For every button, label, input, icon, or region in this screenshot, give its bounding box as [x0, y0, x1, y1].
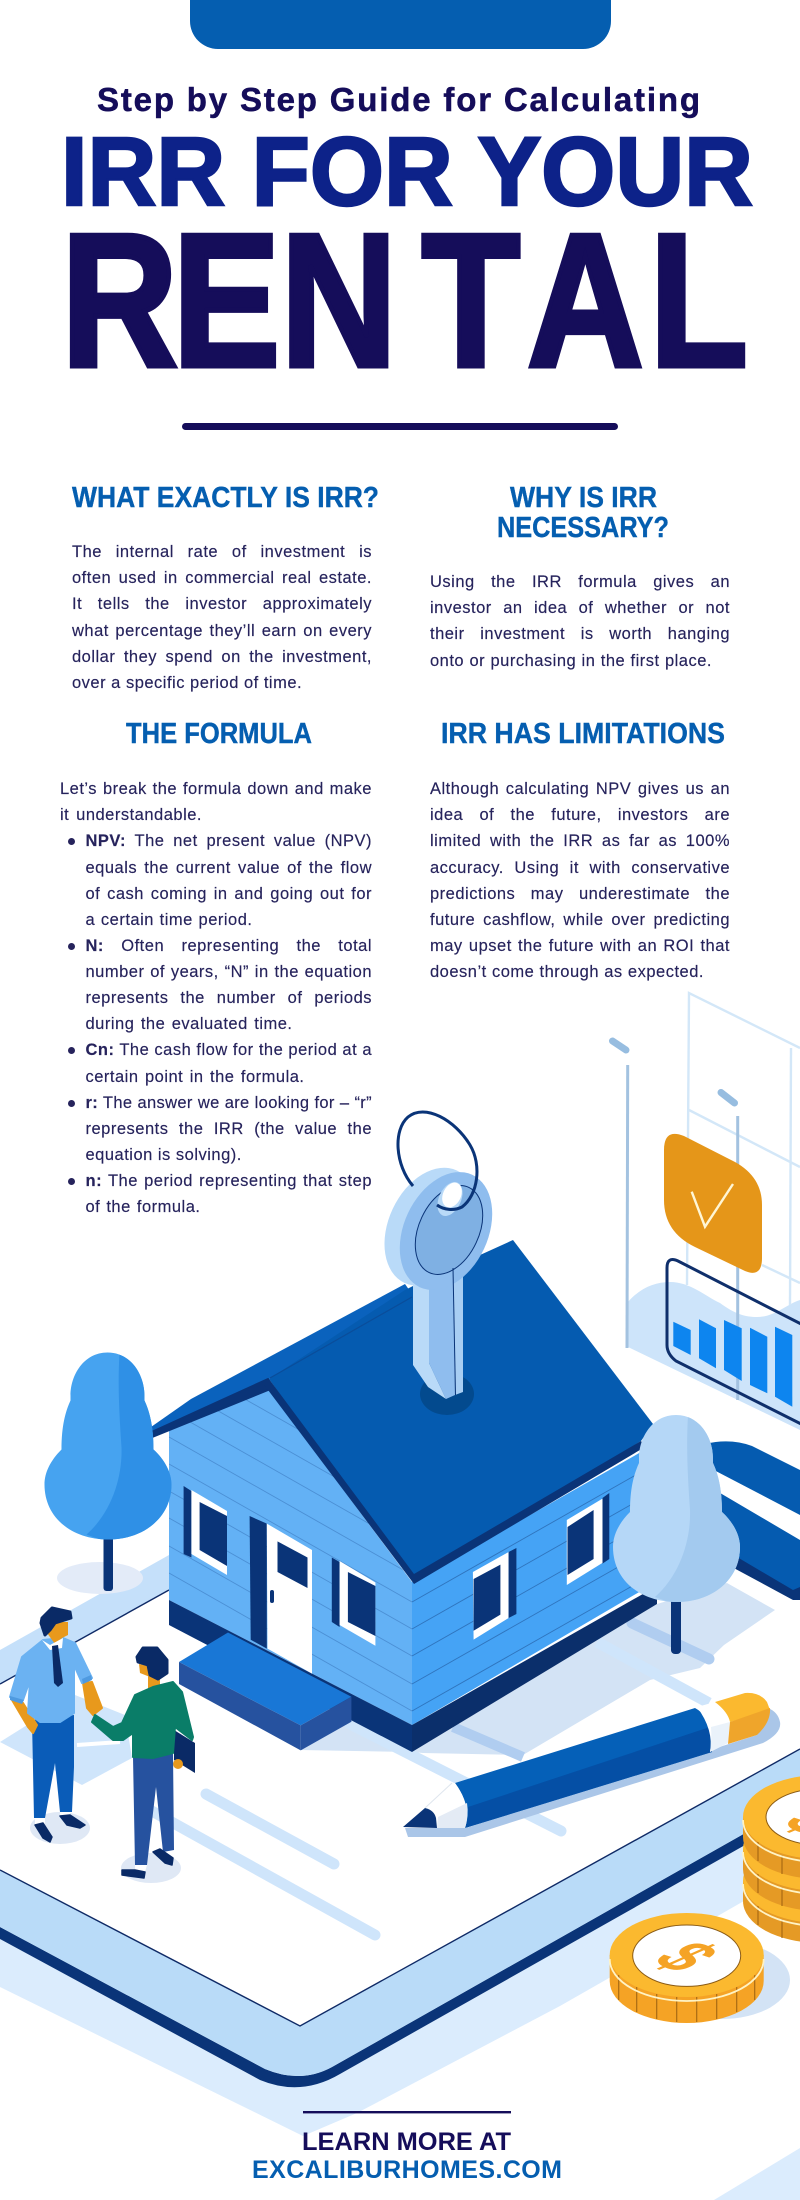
text: why is IRR necessary: onto or purchasing in the first place.	[430, 652, 712, 670]
text: what exactly is IRR: over a specific period of time.	[72, 674, 302, 692]
learn more: LEARN MORE AT	[302, 2128, 511, 2156]
text: the formula: Let’s break the formula down and make	[60, 780, 372, 798]
walls	[169, 1390, 640, 1725]
right chart panel	[612, 993, 800, 1430]
coin stack	[743, 1775, 800, 1943]
text: what exactly is IRR: dollar they spend on the investment,	[72, 648, 372, 666]
text: the formula: equation is solving).	[86, 1146, 242, 1164]
title line one: IRR FOR YOUR	[61, 117, 753, 226]
heading: IRR has limitations: IRR HAS LIMITATIONS	[441, 718, 725, 750]
bottom coin	[743, 1839, 800, 1943]
roof	[131, 1240, 653, 1584]
text: the formula: number of years, “N” in the equation	[86, 963, 372, 981]
key	[366, 1112, 510, 1415]
text: what exactly is IRR	[72, 543, 372, 692]
person: man with tie	[10, 1608, 102, 1844]
pencil	[403, 1693, 780, 1837]
text: the formula: N: Often representing the total	[86, 937, 372, 955]
text: IRR has limitations: idea of the future, investors are	[430, 806, 730, 824]
tablet platform edge	[0, 1555, 800, 2087]
right dark blue card	[705, 1441, 800, 1600]
text: IRR has limitations: future cashflow, while over predicting	[430, 911, 730, 929]
text: the formula: equals the current value of the flow	[86, 859, 372, 877]
text: IRR has limitations	[430, 780, 730, 981]
heading: why is IRR necessary: WHY IS IRR	[510, 482, 657, 514]
foundation	[169, 1586, 657, 1752]
text: what exactly is IRR: It tells the investor approximately	[72, 595, 372, 613]
text: IRR has limitations: doesn’t come through as expected.	[430, 963, 704, 981]
text: the formula: certain point in the formula.	[86, 1068, 304, 1086]
text: why is IRR necessary: their investment is worth hanging	[430, 625, 730, 643]
windows	[184, 1486, 609, 1646]
left tree	[44, 1352, 182, 1591]
title rule	[182, 423, 618, 430]
text: the formula: a certain time period.	[86, 911, 252, 929]
text: the formula: of the formula.	[86, 1198, 200, 1216]
text: the formula: represents the number of periods	[86, 989, 372, 1007]
text: IRR has limitations: predictions may underestimate the	[430, 885, 730, 903]
bars	[673, 1319, 792, 1407]
text: why is IRR necessary: Using the IRR formula gives an	[430, 573, 730, 591]
text: IRR has limitations: limited with the IRR as far as 100%	[430, 832, 730, 850]
text: why is IRR necessary	[430, 573, 730, 670]
key ring	[398, 1112, 477, 1209]
text: what exactly is IRR: what percentage they’ll earn on every	[72, 622, 372, 640]
right tree	[613, 1415, 750, 1654]
pale ground bands	[0, 1814, 800, 2200]
text: the formula: it understandable.	[60, 806, 202, 824]
text: the formula: r: The answer we are looking for – “r”	[86, 1094, 372, 1112]
footer call to action	[252, 2111, 562, 2184]
ground shadows and stripes	[0, 1583, 775, 1935]
top coin	[743, 1775, 800, 1879]
heading: the formula: THE FORMULA	[126, 718, 312, 750]
text: the formula: during the evaluated time.	[86, 1015, 292, 1033]
website: EXCALIBURHOMES.COM	[252, 2156, 562, 2184]
middle coin	[743, 1807, 800, 1911]
text: why is IRR necessary: investor an idea of whether or not	[430, 599, 730, 617]
text: what exactly is IRR: often used in commercial real estate.	[72, 569, 372, 587]
text: the formula: n: The period representing that step	[86, 1172, 372, 1190]
text: the formula	[60, 780, 372, 1216]
step	[179, 1632, 351, 1750]
text: the formula: NPV: The net present value (NPV)	[86, 832, 372, 850]
subtitle: Step by Step Guide for Calculating	[97, 81, 700, 118]
text: what exactly is IRR: The internal rate of investment is	[72, 543, 372, 561]
door	[250, 1516, 312, 1674]
heading: what exactly is IRR: WHAT EXACTLY IS IRR?	[72, 482, 379, 514]
title block	[61, 81, 754, 430]
house	[131, 1240, 657, 1752]
chart frame	[667, 1260, 800, 1425]
person: man in green	[92, 1648, 195, 1883]
text: the formula: of cash coming in and going out for	[86, 885, 372, 903]
text: the formula: represents the IRR (the value the	[86, 1120, 372, 1138]
big coin	[610, 1913, 790, 2023]
text: the formula: Cn: The cash flow for the period at a	[86, 1041, 372, 1059]
text: IRR has limitations: Although calculating NPV gives us an	[430, 780, 730, 798]
dollar sign: $	[635, 1933, 738, 1980]
title line two: RENTAL	[61, 195, 748, 407]
illustration: isometric house scene	[0, 991, 800, 2200]
heading: why is IRR necessary	[497, 482, 669, 544]
section headings	[72, 482, 725, 750]
orange check card	[664, 1134, 762, 1273]
text: IRR has limitations: accuracy. Using it with conservative	[430, 859, 730, 877]
heading: why is IRR necessary: NECESSARY?	[497, 512, 669, 544]
top blue tab	[190, 0, 611, 49]
text: IRR has limitations: may upset the future with an ROI that	[430, 937, 730, 955]
